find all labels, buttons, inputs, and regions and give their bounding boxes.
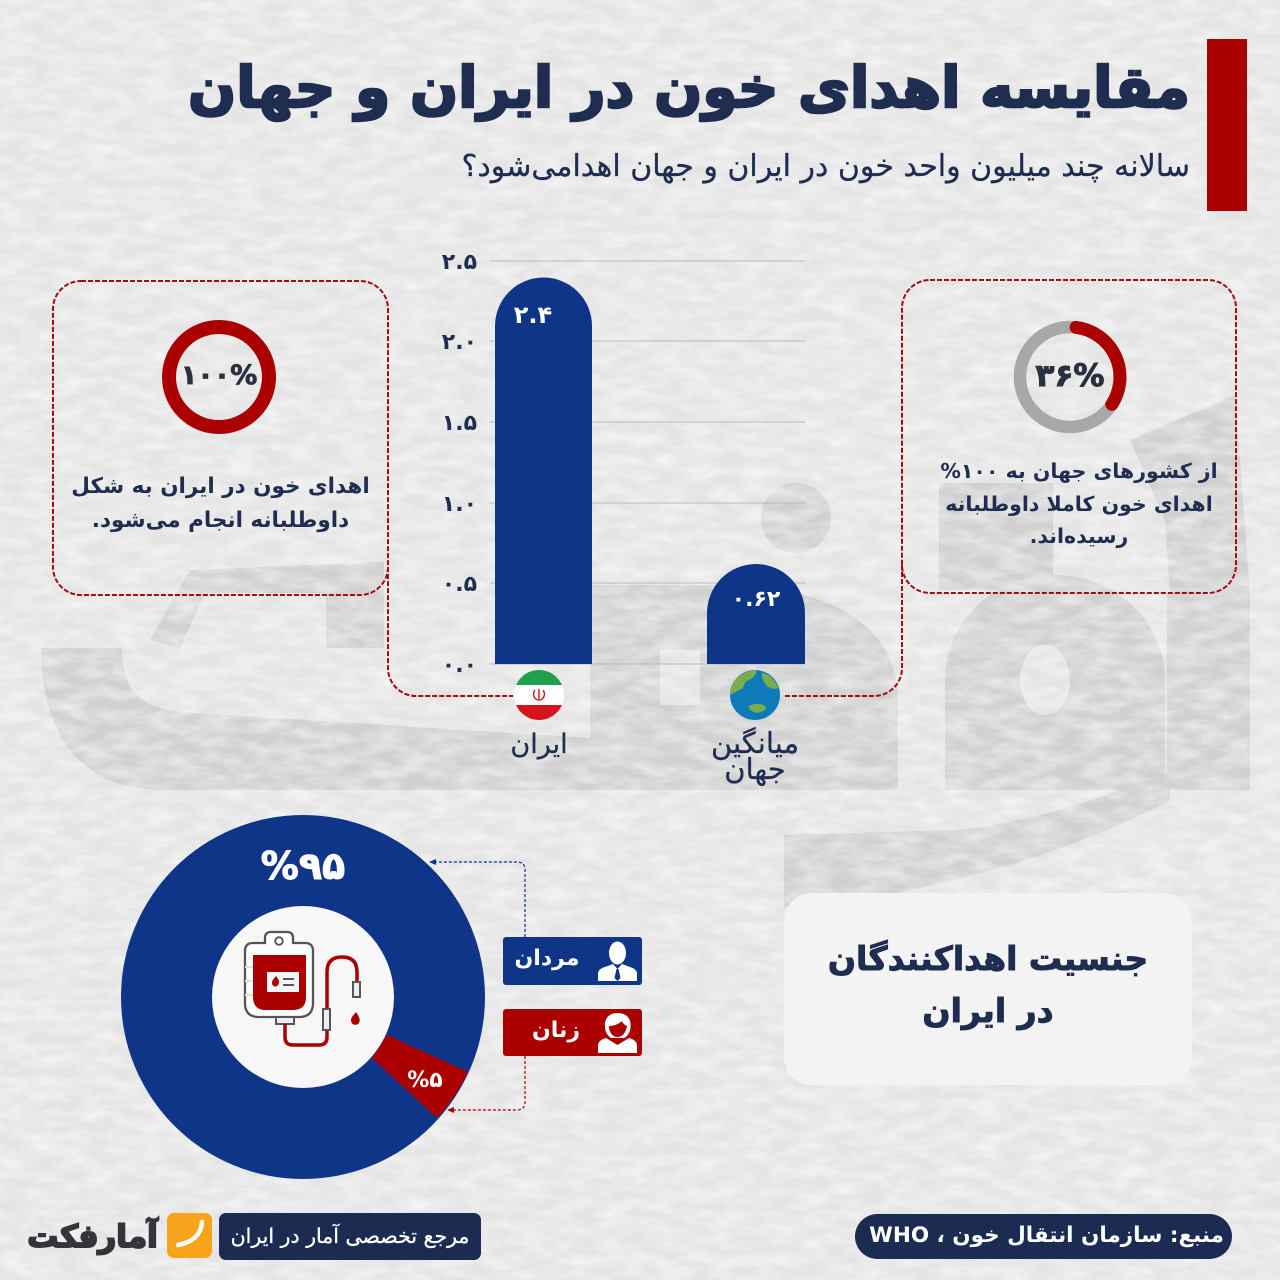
value: Iran: ۲.۴ — [514, 301, 552, 329]
icon: 100 percent ring: ۱۰۰% — [181, 360, 257, 391]
heading text: جنسیت اهداکنندگان — [828, 939, 1148, 978]
bar: world average — [707, 564, 805, 664]
axis labels — [442, 250, 477, 678]
source: منبع: سازمان انتقال خون ، WHO — [869, 1223, 1224, 1248]
icon: woman — [598, 1013, 637, 1053]
icon: 36 percent ring — [1014, 320, 1126, 434]
heading text: در ایران — [922, 991, 1054, 1030]
text: right callout: اهدای خون کاملا داوطلبانه — [945, 492, 1213, 516]
text: right callout: از کشورهای جهان به ۱۰۰% — [940, 459, 1218, 483]
label: world average — [711, 726, 799, 786]
axis labels: ۱.۵ — [442, 411, 477, 436]
legend: women — [503, 1009, 642, 1056]
logo: orange badge — [167, 1213, 212, 1258]
subtitle: سالانه چند میلیون واحد خون در ایران و جهان اهدامی‌شود؟ — [461, 149, 1190, 184]
icon: man — [598, 942, 637, 981]
icon: 100 percent ring — [162, 320, 276, 434]
legend: men — [503, 937, 642, 985]
legend: men: مردان — [515, 946, 579, 971]
axis labels: ۰.۵ — [442, 572, 477, 597]
label: Iran: ایران — [510, 729, 568, 760]
source — [855, 1214, 1232, 1259]
icon: globe — [730, 670, 780, 720]
axis labels: ۲.۰ — [442, 330, 477, 355]
axis labels: ۰.۰ — [442, 653, 477, 678]
tagline: مرجع تخصصی آمار در ایران — [231, 1224, 469, 1248]
heading text — [828, 939, 1148, 1030]
panel: right dashed box — [785, 280, 1236, 696]
label: world average: جهان — [724, 752, 786, 786]
label: world average: میانگین — [711, 726, 799, 760]
text: left callout: اهدای خون در ایران به شکل — [71, 474, 370, 499]
icon: blood bag — [245, 932, 360, 1045]
tagline — [219, 1213, 481, 1260]
icon: Iran flag — [514, 670, 564, 720]
axis labels: ۱.۰ — [442, 492, 477, 517]
logo: wordmark: آمارفکت — [27, 1219, 158, 1255]
text: right callout — [940, 459, 1218, 548]
axis labels: ۲.۵ — [442, 250, 477, 275]
value: 5 percent: %۵ — [407, 1068, 443, 1093]
text: left callout — [71, 474, 370, 533]
bar: Iran — [495, 278, 592, 664]
legend: women: زنان — [532, 1018, 580, 1043]
panel: donor gender heading — [784, 893, 1192, 1085]
text: left callout: داوطلبانه انجام می‌شود. — [92, 508, 349, 533]
value: world: ۰.۶۲ — [732, 587, 780, 612]
value: 95 percent: %۹۵ — [261, 844, 345, 888]
slice: women — [372, 1035, 468, 1118]
panel: left dashed box — [53, 281, 513, 696]
accent bar — [1207, 39, 1247, 211]
text: right callout: رسیده‌اند. — [1030, 524, 1128, 548]
title: مقایسه اهدای خون در ایران و جهان — [188, 56, 1190, 121]
icon: 36 percent ring: ۳۶% — [1036, 358, 1104, 394]
